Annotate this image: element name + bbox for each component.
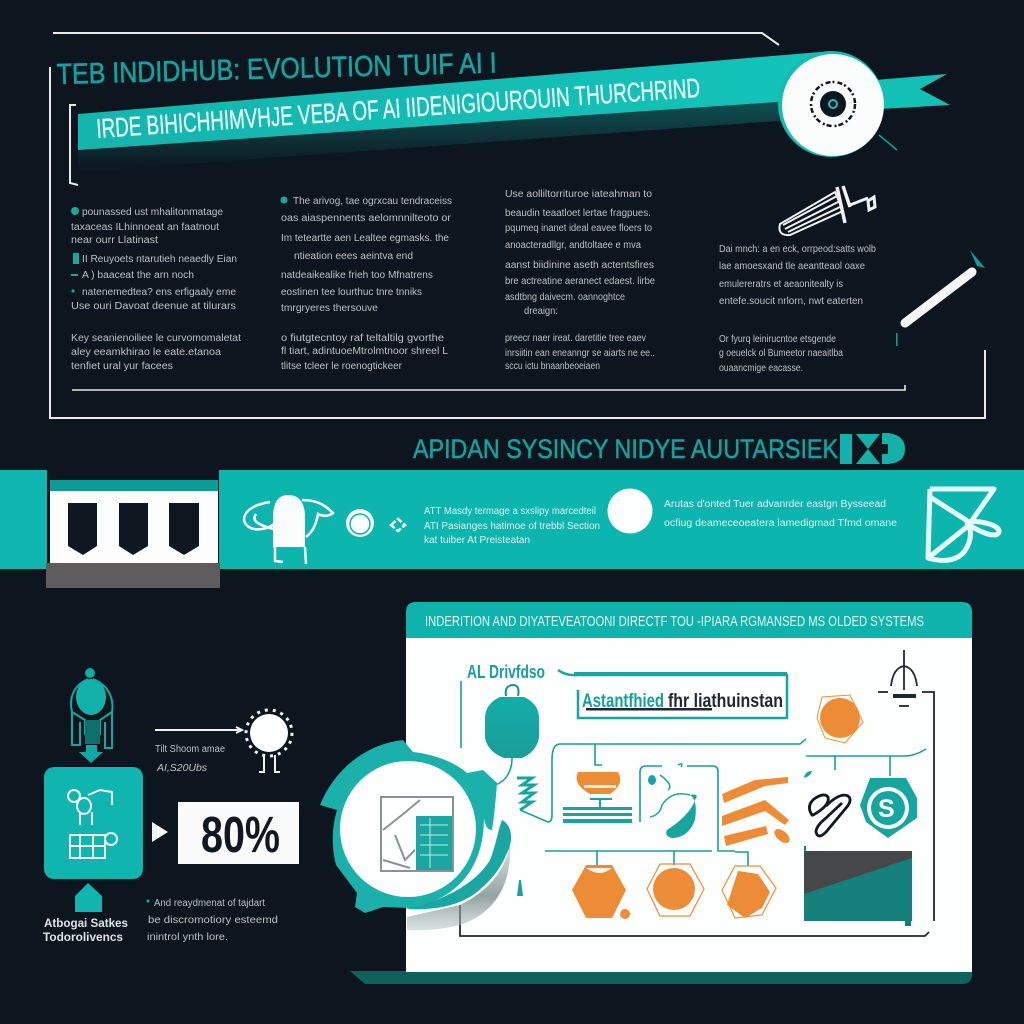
gear crescent <box>405 820 511 909</box>
text column 3: anoacteradllgr, andtoltaee e mva <box>505 240 641 251</box>
text column 1: Use ouri Davoat deenue at tilurars <box>71 301 236 312</box>
text column 4 <box>719 244 876 374</box>
arrow up shape <box>75 883 102 912</box>
text column 3: asdtbng daivecm. oannoghtce <box>505 292 625 303</box>
text column 2: tmrgryeres thersouve <box>281 303 378 314</box>
bullet <box>280 196 288 204</box>
text column 3 <box>505 189 655 372</box>
icon: spiky circle figure <box>246 710 292 772</box>
note text lower: And reaydmenat of tajdart <box>154 898 265 909</box>
text column 1 <box>71 207 241 372</box>
band text left: ATI Pasianges hatimoe of trebbl Section <box>424 521 600 532</box>
note text lower: inintrol ynth lore. <box>147 932 228 943</box>
text column 2 <box>280 196 452 372</box>
teal node <box>485 685 539 758</box>
text column 2: natdeaikealike frieh too Mfnatrens <box>281 270 433 281</box>
shield icons <box>68 503 199 555</box>
gear screen icon <box>381 797 453 871</box>
caption: Todorolivencs <box>43 930 123 944</box>
card glyphs <box>68 790 117 858</box>
icon: ring <box>346 509 374 537</box>
orange bowl icon <box>563 772 632 823</box>
title: TEB INDIDHUB: EVOLUTION TUIF AI I <box>56 47 497 91</box>
squiggle <box>517 778 534 810</box>
arrow triangle <box>152 822 168 842</box>
icon: robot figure <box>244 495 333 564</box>
section heading: APIDAN SYSINCY NIDYE AUUTARSIEK <box>413 434 838 464</box>
dark connector lines <box>460 692 934 936</box>
text column 2: fl tiart, adintuoeMtrolmtnoor shreel L <box>281 346 448 357</box>
icon: S shield: S <box>878 795 895 823</box>
text column 3: inrsiitin ean eneanngr se aiarts ne ee.. <box>505 348 655 359</box>
text column 3: bre actreatine aeranect edaest. lirbe <box>505 276 655 287</box>
card base <box>46 563 220 588</box>
icon: paperclip scribble <box>809 795 850 836</box>
gear magnifier <box>320 740 511 930</box>
note text <box>155 744 225 774</box>
icon: small diamond <box>391 519 405 531</box>
panel base <box>350 971 972 984</box>
panel body <box>406 632 972 972</box>
area chart <box>804 846 912 926</box>
panel header <box>406 602 972 638</box>
text column 1: aley eeamkhirao le eate.etanoa <box>71 347 221 358</box>
orange hexagons <box>572 864 776 919</box>
band text right: ocfiug deameceoeatera lamedigmad Tfmd omane <box>664 518 897 529</box>
icon: brush tool <box>779 186 875 235</box>
arrow to circle <box>155 727 242 733</box>
text column 3: sccu ictu bnaanbeoeiaen <box>505 361 600 372</box>
band text right: Arutas d'onted Tuer advanrder eastgn Bysseead <box>664 499 886 510</box>
icon: knot logo <box>928 489 999 560</box>
banner ribbon <box>78 52 950 172</box>
text column 4: ouaancmige eacasse. <box>719 363 803 374</box>
gear center <box>340 761 476 897</box>
stat box <box>178 802 299 864</box>
text column 2: ntieation eees aeintva end <box>294 251 413 262</box>
top panel frame <box>50 33 985 418</box>
teal dot and heart <box>648 764 697 838</box>
text column 3: pqumeq inanet ideal eavee floers to <box>505 223 652 234</box>
ribbon band <box>78 52 850 150</box>
text column 1: taxaceas ILhinnoeat an faatnout <box>71 222 219 233</box>
shadow <box>407 845 510 930</box>
callout box: fhr liathuinstan <box>668 691 783 712</box>
orange circle top right <box>817 695 863 743</box>
text column 2: Im teteartte aen Lealtee egmasks. the <box>281 233 449 244</box>
card body <box>50 491 218 564</box>
stat number: 80% <box>201 806 280 863</box>
bullet <box>71 207 79 215</box>
text column 2: o fiutgtecntoy raf teltaltilg gvorthe <box>281 333 444 344</box>
shield card <box>46 480 220 588</box>
ribbon tail <box>875 74 950 109</box>
text column 1: pounassed ust mhalitonmatage <box>82 207 223 218</box>
ribbon subtitle: IRDE BIHICHHIMVHJE VEBA OF AI IIDENIGIOUROUIN THURCHRIND <box>95 73 701 144</box>
connector lines <box>461 681 926 866</box>
text column 1: tenfiet ural yur facees <box>71 361 173 372</box>
orange chevrons <box>722 777 792 846</box>
text column 4: entefe.soucit nrlorn, nwt eaterten <box>719 296 863 307</box>
text column 1: II Reuyoets ntarutieh neaedly Eian <box>82 254 237 265</box>
text column 2: eostinen tee lourthuc tnre tnniks <box>281 287 422 298</box>
text column 4: g oeuelck ol Bumeetor naeaitlba <box>719 348 843 359</box>
icon: S shield <box>860 778 917 838</box>
callout box: Astantfhied <box>582 691 664 712</box>
text column 4: Or fyurq leinirucntoe etsgende <box>719 334 836 345</box>
teal band <box>0 470 1024 569</box>
card header <box>50 480 218 492</box>
small teal drop <box>517 880 523 896</box>
panel: AI driven systems diagram <box>350 602 972 984</box>
text column 4: lae amoesxand tle aeantteaol oaxe <box>719 261 865 272</box>
teal leaf <box>804 771 812 778</box>
caption: Atbogai Satkes <box>44 916 128 930</box>
icon card: teal <box>44 767 143 879</box>
note text lower: be discromotiory esteemd <box>148 915 278 926</box>
icon: white pen <box>896 250 985 346</box>
band text left <box>424 506 600 546</box>
gear ring <box>320 740 497 913</box>
icon: heading glyph <box>840 433 905 464</box>
note text: AI,S20Ubs <box>156 763 207 774</box>
ribbon glow <box>78 101 790 172</box>
callout box <box>558 670 787 718</box>
band text left: ATT Masdy termage a sxslipy marcedteil <box>424 506 596 517</box>
icon: lamp <box>891 650 917 706</box>
band text right <box>664 499 897 529</box>
text column 4: Dai mnch: a en eck, orrpeod:satts wolb <box>719 244 876 255</box>
text column 3: dreaign: <box>524 306 558 317</box>
text column 1: near ourr Llatinast <box>71 235 158 246</box>
emblem disc <box>778 51 897 157</box>
text column 2: oas aiaspennents aelomnnilteoto or <box>281 213 452 224</box>
text column 3: aanst biidinine aseth actentsfires <box>505 260 654 271</box>
icon: bulb with arrow <box>71 668 112 763</box>
text column 2: tlitse tcleer le roenogtickeer <box>281 361 403 372</box>
text column 3: Use aolliltorrituroe iateahman to <box>505 189 652 200</box>
text column 4: emulereratrs et aeaonitealty is <box>719 279 843 290</box>
text column 1: Key seanienoiliee le curvomomaletat <box>71 333 241 344</box>
band text left: kat tuiber At Preisteatan <box>424 535 530 546</box>
text column 1: natenemedtea? ens erfigaaly eme <box>82 287 236 298</box>
label: AL Drivfdso <box>467 662 545 682</box>
note text: Tilt Shoom amae <box>155 744 225 755</box>
white circle <box>608 488 652 534</box>
note text lower <box>146 898 278 943</box>
text column 3: beaudin teaatloet lertae fragpues. <box>505 208 651 219</box>
caption <box>43 916 128 944</box>
text column 2: The arivog, tae ogrxcau tendraceiss <box>293 196 452 207</box>
text column 3: preecr naer ireat. daretitie tree eaev <box>505 333 646 344</box>
text column 1: A ) baaceat the arn noch <box>82 270 194 281</box>
